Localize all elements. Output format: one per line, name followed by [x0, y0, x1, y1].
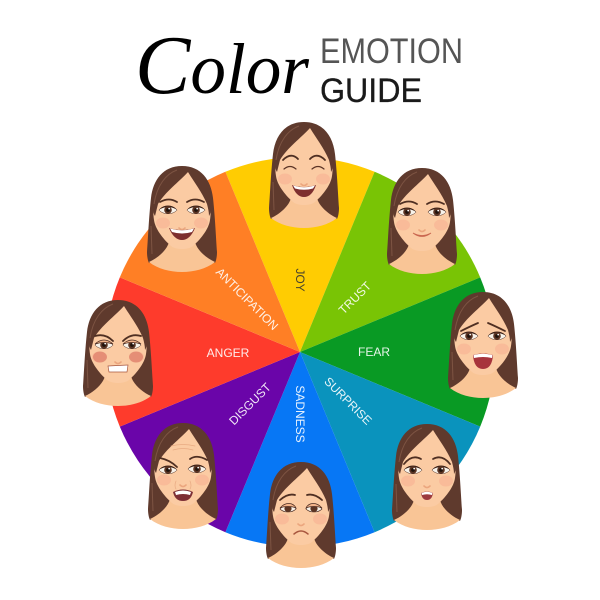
face: trust	[387, 168, 457, 274]
wedge: sadness	[225, 352, 375, 547]
label: disgust: DISGUST	[226, 380, 274, 428]
wedge: fear	[300, 277, 495, 427]
wedge: anticipation	[120, 172, 300, 352]
label: anger: ANGER	[207, 346, 250, 360]
title line: EMOTION: EMOTION	[320, 32, 463, 71]
label: surprise: SURPRISE	[321, 374, 375, 428]
label: anticipation: ANTICIPATION	[213, 265, 281, 333]
label: trust: TRUST	[336, 278, 375, 317]
title line: GUIDE: GUIDE	[320, 72, 422, 110]
wedge: disgust	[120, 352, 300, 532]
title	[135, 19, 463, 112]
face: surprise	[392, 424, 462, 530]
wedge: joy	[225, 157, 375, 352]
label: joy: JOY	[293, 268, 307, 292]
face: fear	[448, 292, 518, 398]
wedge: anger	[105, 277, 300, 427]
wedge labels	[207, 265, 390, 443]
face: sadness	[266, 462, 336, 568]
title script word: Color: Color	[135, 19, 310, 112]
wedge: trust	[300, 172, 480, 352]
face: disgust	[148, 423, 218, 529]
face: anticipation	[147, 166, 217, 272]
face: anger	[83, 300, 153, 406]
wedge: surprise	[300, 352, 480, 532]
label: fear: FEAR	[358, 345, 390, 359]
emotion colour wheel	[105, 157, 495, 547]
face: joy	[269, 122, 339, 228]
label: sadness: SADNESS	[293, 385, 307, 443]
